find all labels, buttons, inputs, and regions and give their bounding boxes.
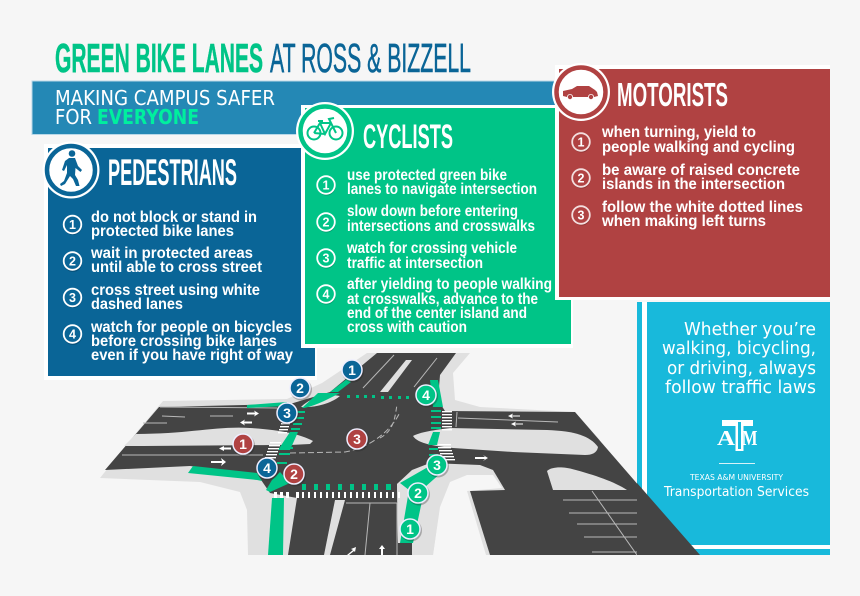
list: motorist rules: when making left turns bbox=[601, 213, 766, 230]
list: cyclist rules: after yielding to people walking bbox=[347, 276, 552, 293]
panel: cyclists bbox=[296, 102, 573, 348]
numbered markers bbox=[64, 216, 82, 345]
numbered markers bbox=[572, 133, 590, 226]
lane lines bbox=[122, 355, 680, 555]
list: pedestrian rules: cross street using white bbox=[91, 282, 260, 299]
list: cyclist rules: at crosswalks, advance to the bbox=[347, 291, 538, 308]
list: cyclist rules: intersections and crosswalks bbox=[347, 218, 535, 235]
title: GREEN BIKE LANES bbox=[55, 35, 263, 81]
numbered markers: 2 bbox=[69, 254, 76, 268]
map markers: cyclists: 4 bbox=[422, 387, 430, 403]
banner: making campus safer bbox=[32, 81, 557, 134]
map markers: motorists: 2 bbox=[290, 466, 298, 482]
safety message: Whether you’re bbox=[684, 319, 816, 340]
list: pedestrian rules: wait in protected areas bbox=[90, 245, 253, 262]
organization name: Transportation Services bbox=[663, 484, 809, 500]
numbered markers: 1 bbox=[578, 136, 585, 150]
list: pedestrian rules: dashed lanes bbox=[91, 296, 183, 313]
map markers: pedestrians bbox=[257, 360, 364, 480]
list: cyclist rules: slow down before entering bbox=[347, 203, 518, 220]
logo: Texas A&M: M bbox=[742, 426, 758, 450]
list: pedestrian rules: even if you have right of way bbox=[91, 347, 293, 364]
west median bbox=[124, 428, 313, 446]
numbered markers: 1 bbox=[69, 218, 76, 232]
panel: pedestrians: PEDESTRIANS bbox=[108, 152, 237, 193]
dark roadway bbox=[105, 353, 699, 555]
map markers: pedestrians: 1 bbox=[348, 362, 356, 378]
numbered markers: 2 bbox=[578, 172, 585, 186]
logo: Texas A&M: A bbox=[717, 426, 736, 450]
map markers: cyclists bbox=[400, 385, 449, 542]
north median bbox=[380, 360, 412, 392]
map markers: motorists: 3 bbox=[353, 431, 361, 447]
map markers: cyclists: 3 bbox=[433, 457, 441, 473]
safety message: walking, bicycling, bbox=[662, 338, 816, 359]
north-west island bbox=[301, 395, 340, 407]
logo: Texas A&M bbox=[717, 420, 758, 464]
panel: pedestrians bbox=[42, 142, 317, 380]
south median bbox=[324, 500, 345, 555]
south-east corner bbox=[433, 475, 502, 555]
banner: making campus safer: EVERYONE bbox=[97, 105, 199, 129]
numbered markers: 3 bbox=[69, 291, 76, 305]
east median bbox=[413, 428, 598, 455]
green bike lanes bbox=[188, 379, 443, 555]
list: cyclist rules: cross with caution bbox=[347, 319, 467, 336]
panel: motorists bbox=[552, 63, 830, 300]
numbered markers: 3 bbox=[578, 208, 585, 222]
map markers: pedestrians: 4 bbox=[263, 460, 271, 476]
list: pedestrian rules: do not block or stand in bbox=[91, 209, 257, 226]
safety message bbox=[662, 319, 816, 398]
list: motorist rules: when turning, yield to bbox=[601, 124, 756, 141]
banner: making campus safer: MAKING CAMPUS SAFER bbox=[55, 86, 275, 110]
list: motorist rules: islands in the intersection bbox=[602, 176, 785, 193]
icon: pedestrian bbox=[42, 142, 100, 198]
list: cyclist rules: lanes to navigate intersection bbox=[347, 181, 537, 198]
list: pedestrian rules bbox=[90, 209, 293, 364]
list: motorist rules: people walking and cycling bbox=[602, 139, 795, 156]
list: pedestrian rules: until able to cross street bbox=[91, 259, 263, 276]
heading: cyclists: CYCLISTS bbox=[363, 118, 453, 156]
map markers: cyclists: 2 bbox=[414, 485, 422, 501]
list: motorist rules: follow the white dotted lines bbox=[602, 199, 803, 216]
white crosswalks bbox=[265, 411, 455, 498]
banner: making campus safer: FOR bbox=[55, 105, 92, 129]
numbered markers: 4 bbox=[323, 288, 330, 302]
road intersection map bbox=[100, 353, 699, 555]
map markers: motorists bbox=[233, 429, 369, 486]
list: pedestrian rules: watch for people on bicycles bbox=[90, 319, 292, 336]
list: cyclist rules bbox=[346, 167, 552, 336]
list: cyclist rules: end of the center island and bbox=[347, 305, 527, 322]
numbered markers: 2 bbox=[323, 216, 330, 230]
list: cyclist rules: watch for crossing vehicle bbox=[346, 240, 517, 257]
numbered markers: 4 bbox=[69, 328, 76, 342]
list: cyclist rules: traffic at intersection bbox=[347, 255, 483, 272]
numbered markers: 1 bbox=[323, 178, 330, 192]
organization name bbox=[663, 473, 809, 500]
east triangular island bbox=[547, 467, 627, 490]
numbered markers: 3 bbox=[323, 252, 330, 266]
title: AT ROSS & BIZZELL bbox=[270, 35, 471, 81]
map markers: motorists: 1 bbox=[239, 436, 247, 452]
panel: info box bbox=[637, 302, 830, 555]
icon: car bbox=[552, 63, 610, 121]
list: motorist rules bbox=[601, 124, 803, 230]
map markers: pedestrians: 3 bbox=[283, 405, 291, 421]
safety message: follow traffic laws bbox=[665, 377, 816, 398]
list: pedestrian rules: before crossing bike lanes bbox=[91, 333, 277, 350]
safety message: or driving, always bbox=[667, 358, 816, 379]
list: motorist rules: be aware of raised concrete bbox=[602, 162, 800, 179]
icon: bicycle bbox=[296, 102, 354, 160]
organization name: TEXAS A&M UNIVERSITY bbox=[689, 473, 783, 482]
list: cyclist rules: use protected green bike bbox=[347, 167, 507, 184]
map markers: pedestrians: 2 bbox=[296, 380, 304, 396]
road corner overlap bbox=[637, 483, 700, 555]
numbered markers bbox=[317, 176, 336, 304]
sidewalk base bbox=[100, 353, 600, 555]
pavement arrows bbox=[211, 410, 523, 555]
list: pedestrian rules: protected bike lanes bbox=[91, 223, 234, 240]
map markers: cyclists: 1 bbox=[406, 521, 414, 537]
heading: motorists: MOTORISTS bbox=[617, 76, 728, 113]
